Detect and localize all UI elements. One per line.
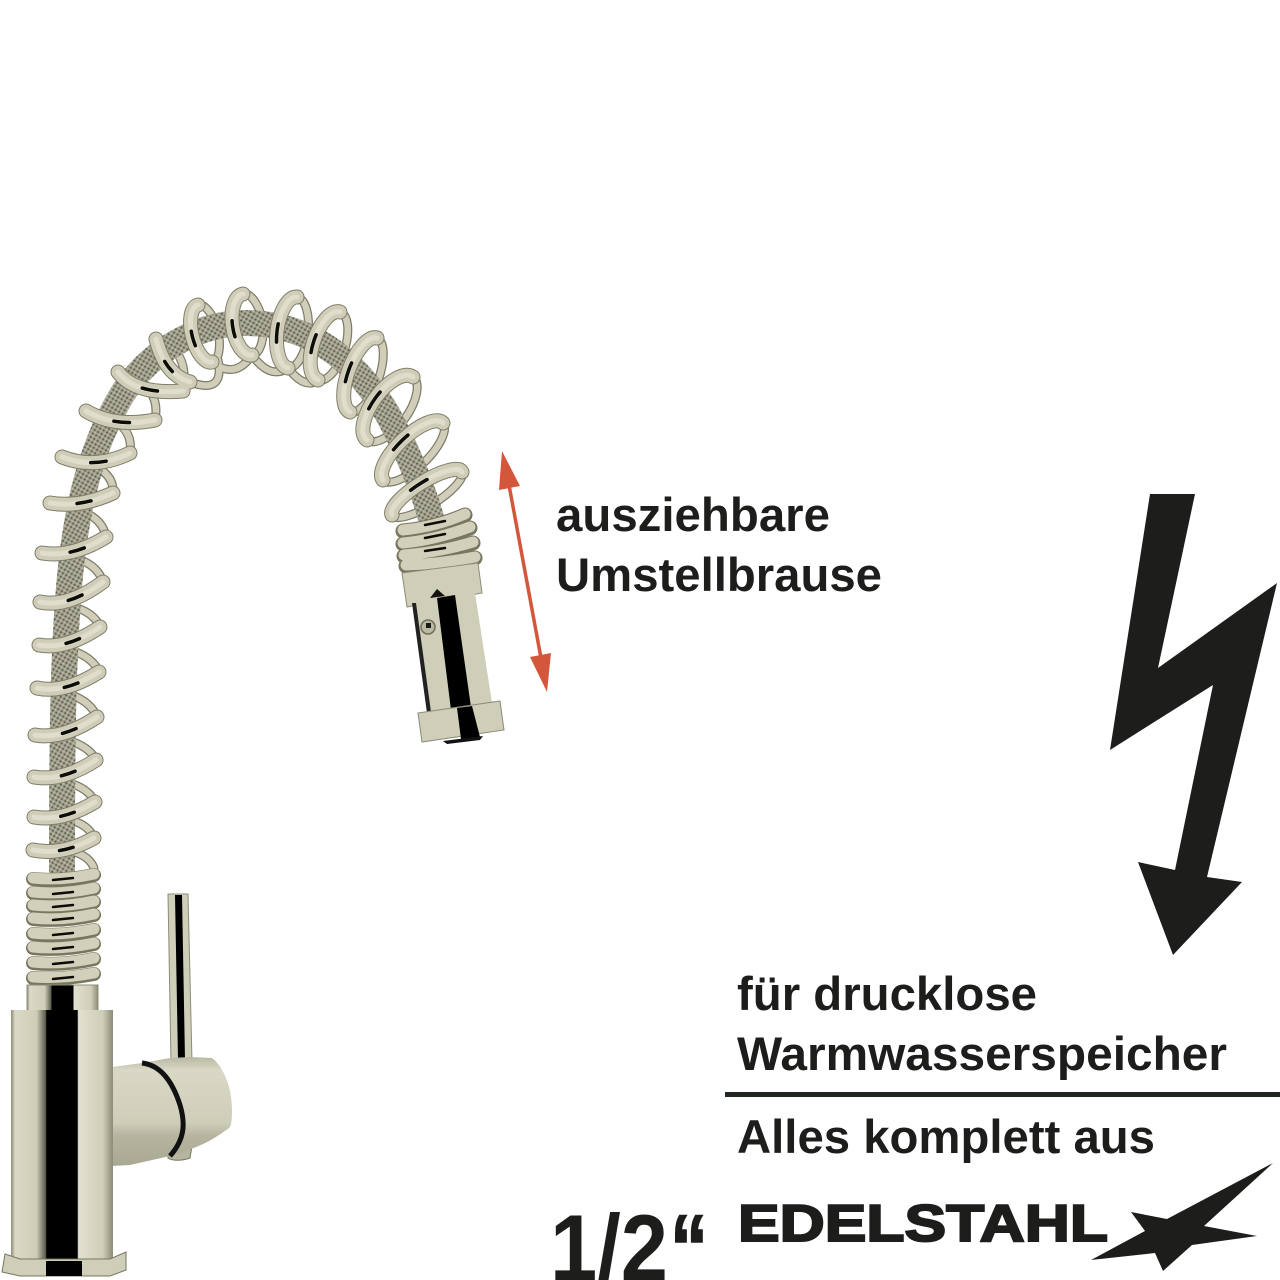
coil front windings bbox=[33, 294, 462, 852]
text: pressureless heaters: Warmwasserspeicher bbox=[737, 1028, 1227, 1081]
arrow head down bbox=[530, 653, 551, 692]
hex sleeve bbox=[402, 563, 482, 607]
sleeve notch bbox=[430, 589, 445, 598]
text: stainless steel: EDELSTAHL bbox=[738, 1195, 1108, 1253]
double arrow: pull-out travel bbox=[499, 451, 551, 692]
screw bbox=[421, 620, 435, 634]
braided hose bbox=[62, 323, 433, 880]
mixer ring bbox=[142, 1063, 183, 1156]
main body bbox=[11, 1010, 113, 1260]
base reflection bbox=[46, 1261, 82, 1276]
pull-out spray head bbox=[402, 514, 504, 744]
icon: lightning bolt arrow bbox=[1110, 494, 1277, 955]
label: spray head: Umstellbrause bbox=[556, 549, 882, 602]
mixer housing bbox=[112, 1057, 232, 1166]
cap reflection bbox=[457, 706, 480, 739]
cylinder left edge bbox=[412, 603, 431, 713]
mixer nub bbox=[168, 1146, 192, 1160]
text: all made of: Alles komplett aus bbox=[737, 1111, 1155, 1164]
coil back windings bbox=[33, 294, 462, 868]
compact spring at base bbox=[33, 874, 94, 979]
lever handle bbox=[168, 894, 192, 1064]
nozzle outlet bbox=[443, 736, 483, 744]
body base bbox=[2, 1252, 126, 1276]
nozzle cap bbox=[418, 701, 504, 742]
screw slot bbox=[426, 623, 431, 628]
label: spray head: ausziehbare bbox=[556, 489, 830, 542]
text: pressureless heaters: für drucklose bbox=[737, 968, 1037, 1021]
icon: star swoosh bbox=[1091, 1163, 1273, 1271]
label: spray head bbox=[556, 489, 882, 602]
collar bbox=[27, 985, 98, 1013]
arrow head up bbox=[499, 451, 520, 490]
divider bbox=[725, 1092, 1280, 1097]
faucet illustration bbox=[2, 294, 504, 1276]
cylinder reflection bbox=[437, 595, 471, 710]
lever highlight bbox=[175, 895, 185, 1060]
spray head cylinder bbox=[412, 593, 492, 713]
spray head spring rings bbox=[403, 514, 475, 566]
text: pressureless heaters bbox=[737, 968, 1227, 1081]
arrow shaft bbox=[509, 485, 541, 658]
